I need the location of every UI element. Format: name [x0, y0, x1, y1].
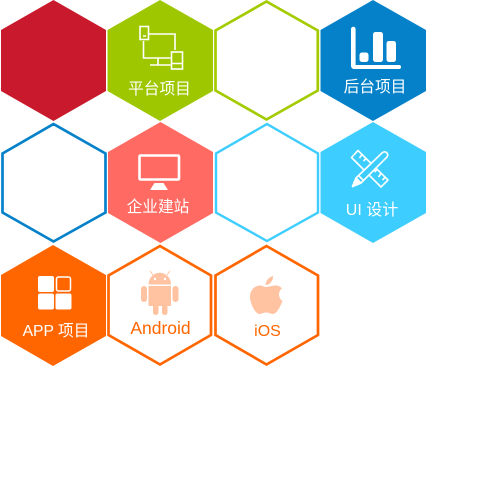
- hexagon: iOS: [216, 246, 318, 364]
- icon: apple: [250, 276, 282, 314]
- hexagon: APP project: [1, 245, 106, 366]
- hexagon: UI design: [320, 122, 426, 243]
- label: iOS: [254, 323, 281, 340]
- hexagon: backend project: [320, 0, 426, 121]
- label: 后台项目: [344, 78, 406, 96]
- hexagon: blue outline: [2, 124, 106, 242]
- icon: android robot: [141, 271, 178, 315]
- hexagon: platform project: [108, 0, 213, 121]
- icon: pencil and ruler: [352, 150, 388, 187]
- hexagon: website project: [108, 122, 213, 243]
- hexagon: Android: [108, 246, 211, 364]
- hexagon: green outline: [216, 2, 318, 120]
- hexagon: solid red: [1, 0, 106, 121]
- icon: connected devices: [140, 26, 182, 69]
- hexagon: light blue outline: [216, 124, 318, 241]
- label: APP 项目: [23, 323, 89, 340]
- icon: app tiles: [38, 276, 72, 310]
- label: UI 设计: [346, 201, 398, 219]
- icon: monitor: [140, 156, 179, 190]
- label: 企业建站: [127, 198, 190, 216]
- label: Android: [130, 318, 191, 338]
- label: 平台项目: [128, 80, 191, 98]
- icon: bar chart: [351, 27, 401, 69]
